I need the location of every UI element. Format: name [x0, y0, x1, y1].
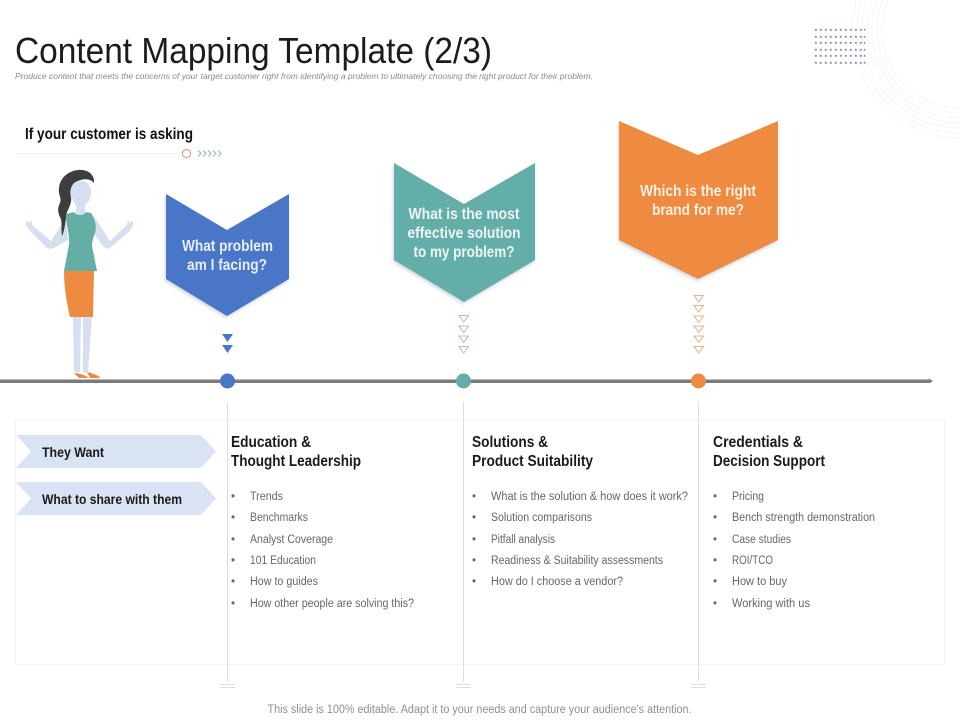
chevron: most effective solution: What is the most — [408, 206, 520, 223]
column 3 bullet list: Working with us — [732, 598, 810, 610]
column 3 bullet list: Case studies — [732, 534, 791, 546]
column 3 bullet list — [713, 491, 875, 610]
decorative dot grid — [815, 29, 865, 64]
column 2 heading: Solutions & — [472, 434, 548, 451]
chevron: most effective solution: to my problem? — [414, 244, 514, 261]
column 1 bullet list: • — [231, 512, 235, 524]
legs — [73, 317, 92, 372]
row label: they want: They Want — [42, 445, 104, 460]
timeline node: blue — [220, 374, 235, 388]
column 3 heading: Credentials & — [713, 434, 803, 451]
column 3 bullet list: Bench strength demonstration — [732, 512, 875, 524]
column 2 bullet list — [472, 491, 688, 588]
chevron: right brand: Which is the right — [640, 183, 756, 200]
column 2 bullet list: How do I choose a vendor? — [491, 576, 623, 588]
row label: what to share: What to share with them — [42, 492, 182, 507]
column 2 bullet list: What is the solution & how does it work? — [491, 491, 688, 503]
column 3 bullet list: • — [713, 512, 717, 524]
column 1 bullet list: Trends — [250, 491, 283, 503]
timeline node: orange — [691, 374, 706, 388]
column 1: education and thought leadership — [231, 434, 414, 610]
column 1 bullet list: • — [231, 576, 235, 588]
timeline node: teal — [456, 374, 471, 388]
head and neck — [71, 181, 91, 215]
column 2 heading — [472, 434, 593, 470]
chevron: what problem: What problem — [182, 238, 273, 255]
column 2 bullet list: Readiness & Suitability assessments — [491, 555, 663, 567]
column 2 bullet list: • — [472, 534, 476, 546]
arrows: outlined orange triangles — [694, 296, 704, 353]
chevron: most effective solution — [394, 163, 535, 302]
chevron: what problem — [166, 194, 289, 316]
column 1 heading: Education & — [231, 434, 311, 451]
column 2 bullet list: Solution comparisons — [491, 512, 592, 524]
column 1 bullet list: 101 Education — [250, 555, 316, 567]
column 1 bullet list — [231, 491, 414, 610]
chevron: right brand: brand for me? — [652, 202, 744, 219]
column 1 bullet list: How other people are solving this? — [250, 598, 414, 610]
column 1 heading — [231, 434, 361, 470]
arrows: solid blue triangles — [222, 334, 233, 353]
column 1 bullet list: • — [231, 555, 235, 567]
subtitle: Produce content that meets the concerns of your target customer right from identifying a problem to ultimately choosing the right product for their problem. — [15, 71, 593, 81]
title: Content Mapping Template (2/3) — [15, 30, 492, 71]
column 3 bullet list: • — [713, 491, 717, 503]
column 3 bullet list: Pricing — [732, 491, 764, 503]
column 3 bullet list: • — [713, 576, 717, 588]
decorative concentric rings — [852, 0, 960, 138]
column divider 3 — [691, 402, 706, 688]
column 3 bullet list: • — [713, 555, 717, 567]
column 3 bullet list: ROI/TCO — [732, 555, 773, 567]
row label: what to share — [16, 482, 216, 515]
column 1 bullet list: How to guides — [250, 576, 318, 588]
skirt — [64, 271, 94, 317]
row label: they want — [16, 435, 216, 468]
column divider 1 — [220, 402, 235, 688]
column 2 bullet list: • — [472, 512, 476, 524]
column 1 heading: Thought Leadership — [231, 453, 361, 470]
top — [64, 212, 97, 271]
column 3 bullet list: How to buy — [732, 576, 787, 588]
column 2 bullet list: Pitfall analysis — [491, 534, 555, 546]
column 2: solutions and product suitability — [472, 434, 688, 588]
timeline — [0, 374, 933, 388]
column 1 bullet list: Benchmarks — [250, 512, 308, 524]
column 3: credentials and decision support — [713, 434, 875, 610]
chevron: what problem: am I facing? — [187, 257, 267, 274]
column 1 bullet list: Analyst Coverage — [250, 534, 333, 546]
chevron: right brand — [619, 121, 778, 279]
column 3 bullet list: • — [713, 598, 717, 610]
column 2 bullet list: • — [472, 576, 476, 588]
arms — [26, 216, 133, 249]
column 2 heading: Product Suitability — [472, 453, 593, 470]
chevron: most effective solution: effective solution — [408, 225, 520, 242]
column 1 bullet list: • — [231, 491, 235, 503]
shoes — [74, 372, 100, 378]
column 1 bullet list: • — [231, 534, 235, 546]
column divider 2 — [456, 402, 471, 688]
column 2 bullet list: • — [472, 555, 476, 567]
footer note: This slide is 100% editable. Adapt it to your needs and capture your audience's attention. — [268, 704, 692, 716]
column 1 bullet list: • — [231, 598, 235, 610]
table panel outline — [16, 420, 944, 664]
arrows: outlined teal triangles — [459, 316, 468, 353]
heading: if your customer is asking: If your customer is asking — [25, 126, 193, 143]
icon: woman with raised hands — [26, 170, 133, 378]
column 2 bullet list: • — [472, 491, 476, 503]
hair — [58, 170, 94, 236]
heading: if your customer is asking — [16, 126, 221, 158]
column 3 bullet list: • — [713, 534, 717, 546]
column 3 heading — [713, 434, 825, 470]
column 3 heading: Decision Support — [713, 453, 825, 470]
